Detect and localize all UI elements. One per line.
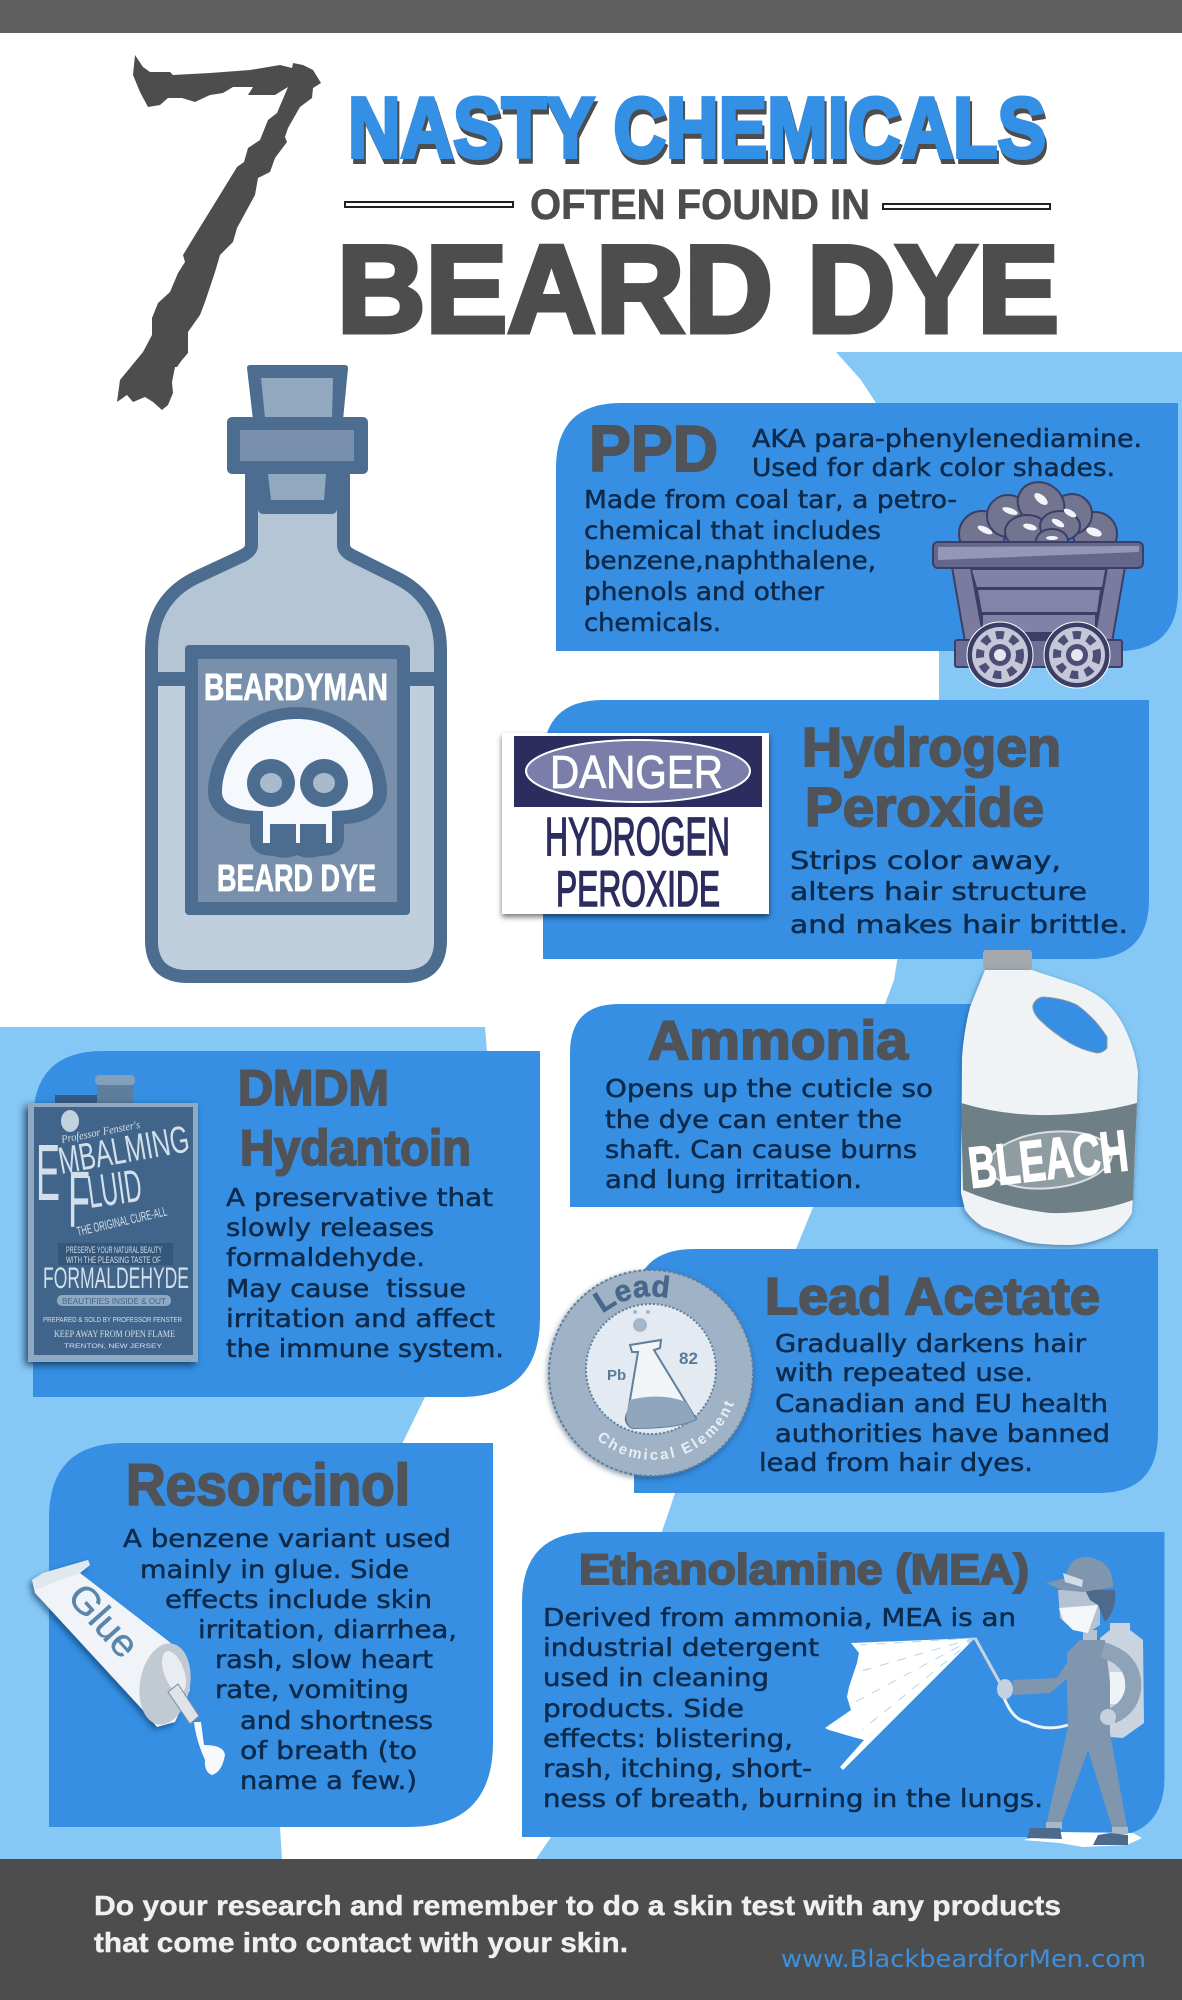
text: DMDM description: formaldehyde. bbox=[226, 1243, 425, 1272]
icon: embalming fluid flask: E bbox=[36, 1128, 60, 1217]
text: DMDM description bbox=[226, 1183, 504, 1363]
footer bar bbox=[0, 1859, 1182, 2000]
text: MEA description bbox=[543, 1603, 1043, 1813]
panel: Hydrogen Peroxide bbox=[502, 700, 1149, 959]
text: PPD description: chemical that includes bbox=[584, 516, 881, 545]
icon: glue tube: Glue bbox=[59, 1576, 147, 1666]
heading: Hydrogen Peroxide bbox=[802, 716, 1061, 838]
heading: Resorcinol: Resorcinol bbox=[126, 1453, 410, 1518]
icon: embalming fluid flask: PRESERVE YOUR NATURAL BEAUTY bbox=[66, 1245, 162, 1255]
icon: embalming fluid flask: THE ORIGINAL CURE-ALL bbox=[75, 1204, 168, 1239]
panel: Resorcinol bbox=[32, 1443, 493, 1827]
text: MEA description: products. Side bbox=[543, 1694, 744, 1723]
icon: danger sign: DANGER bbox=[550, 746, 723, 798]
title: Nasty Chemicals: NASTY CHEMICALS bbox=[350, 86, 1048, 181]
icon: spray cone bbox=[825, 1638, 975, 1770]
text: Resorcinol description: name a few.) bbox=[240, 1766, 417, 1795]
icon: embalming fluid flask: WITH THE PLEASING TASTE OF bbox=[66, 1255, 161, 1265]
heading: Hydrogen Peroxide: Hydrogen bbox=[802, 716, 1061, 778]
subtitle: often found in: OFTEN FOUND IN bbox=[530, 181, 870, 229]
icon: embalming fluid flask: TRENTON, NEW JERSEY bbox=[64, 1344, 162, 1350]
text: PPD description: AKA para-phenylenediamine. bbox=[752, 424, 1142, 453]
text: DMDM description: slowly releases bbox=[226, 1213, 434, 1242]
text: MEA description: rash, itching, short- bbox=[543, 1754, 812, 1783]
heading: DMDM Hydantoin bbox=[238, 1060, 471, 1176]
text: Resorcinol description: rate, vomiting bbox=[215, 1675, 409, 1704]
text: Hydrogen Peroxide description: alters hair structure bbox=[790, 877, 1087, 906]
panel: PPD bbox=[556, 403, 1178, 688]
bottle label text: Beard Dye: BEARD DYE bbox=[217, 858, 376, 900]
numeral 7 bbox=[117, 55, 321, 410]
panel: Ammonia bbox=[570, 950, 1138, 1245]
text: Hydrogen Peroxide description: and makes hair brittle. bbox=[790, 910, 1128, 939]
text: DMDM description: irritation and affect bbox=[226, 1304, 495, 1333]
icon: lead element badge bbox=[544, 1268, 756, 1482]
background shape: right light blue bbox=[536, 352, 1182, 1859]
text: Ammonia description bbox=[605, 1074, 933, 1194]
heading: DMDM Hydantoin: Hydantoin bbox=[240, 1120, 471, 1176]
text: Ammonia description: Opens up the cuticle so bbox=[605, 1074, 933, 1103]
icon: lead element badge: Lead bbox=[592, 1275, 670, 1313]
icon: danger sign bbox=[502, 733, 769, 917]
icon: embalming fluid flask bbox=[28, 1075, 198, 1362]
text: Lead Acetate description: Gradually darkens hair bbox=[775, 1329, 1087, 1358]
icon: embalming fluid flask: Professor Fenster's bbox=[59, 1119, 141, 1146]
text: PPD description: benzene,naphthalene, bbox=[584, 546, 876, 575]
text: MEA description: industrial detergent bbox=[543, 1633, 819, 1662]
title: Beard Dye: BEARD DYE bbox=[337, 221, 1059, 359]
icon: lead element badge: Chemical Element bbox=[598, 1400, 734, 1460]
icon: embalming fluid flask: PREPARED & SOLD BY PROFESSOR FENSTER bbox=[43, 1317, 182, 1324]
text: Resorcinol description: rash, slow heart bbox=[215, 1645, 433, 1674]
subtitle: often found in bbox=[345, 181, 1050, 229]
heading: PPD: PPD bbox=[589, 412, 718, 485]
background shape: left light blue bbox=[0, 1027, 540, 1859]
heading: DMDM Hydantoin: DMDM bbox=[238, 1060, 389, 1116]
icon: embalming fluid flask: MBALMING bbox=[55, 1119, 193, 1183]
icon: bleach jug bbox=[961, 950, 1138, 1245]
heading: Ammonia: Ammonia bbox=[648, 1009, 908, 1071]
text: Resorcinol description: mainly in glue. Side bbox=[140, 1555, 409, 1584]
icon: coal mine cart bbox=[933, 474, 1143, 688]
footer message: Do your research and remember to do a skin test with any products bbox=[94, 1890, 1061, 1921]
text: PPD description bbox=[584, 424, 1142, 637]
icon: embalming fluid flask: KEEP AWAY FROM OPEN FLAME bbox=[54, 1329, 175, 1339]
icon: danger sign: HYDROGEN bbox=[545, 807, 730, 867]
icon: embalming fluid flask: F bbox=[68, 1155, 90, 1244]
panel: Lead Acetate bbox=[544, 1249, 1158, 1493]
text: DMDM description: the immune system. bbox=[226, 1334, 504, 1363]
text: MEA description: effects: blistering, bbox=[543, 1724, 793, 1753]
panel: DMDM Hydantoin bbox=[28, 1051, 540, 1397]
text: Hydrogen Peroxide description: Strips color away, bbox=[790, 846, 1061, 875]
icon: embalming fluid flask: LUID bbox=[84, 1159, 145, 1218]
text: PPD description: Made from coal tar, a petro- bbox=[584, 485, 957, 514]
icon: skull bbox=[208, 707, 387, 858]
heading: Ethanolamine (MEA): Ethanolamine (MEA) bbox=[579, 1546, 1029, 1594]
icon: lead element badge: Pb bbox=[607, 1367, 626, 1384]
icon: poison bottle bbox=[148, 365, 444, 976]
text: DMDM description: A preservative that bbox=[226, 1183, 493, 1212]
text: MEA description: used in cleaning bbox=[543, 1663, 769, 1692]
text: Lead Acetate description: lead from hair dyes. bbox=[759, 1448, 1033, 1477]
text: Resorcinol description: A benzene variant used bbox=[123, 1524, 451, 1553]
icon: lead element badge: 82 bbox=[679, 1349, 698, 1368]
text: PPD description: chemicals. bbox=[584, 608, 721, 637]
text: Lead Acetate description: Canadian and EU health bbox=[775, 1389, 1108, 1418]
text: Resorcinol description: and shortness bbox=[240, 1706, 433, 1735]
text: PPD description: phenols and other bbox=[584, 577, 825, 606]
text: Ammonia description: and lung irritation. bbox=[605, 1165, 862, 1194]
text: Hydrogen Peroxide description bbox=[790, 846, 1128, 939]
top bar bbox=[0, 0, 1182, 33]
panel: Ethanolamine MEA bbox=[522, 1532, 1164, 1847]
text: Lead Acetate description: authorities have banned bbox=[775, 1419, 1110, 1448]
title: Nasty Chemicals: NASTY CHEMICALS bbox=[348, 81, 1046, 176]
text: Lead Acetate description bbox=[759, 1329, 1110, 1477]
icon: embalming fluid flask: FORMALDEHYDE bbox=[43, 1262, 189, 1295]
footer message bbox=[94, 1890, 1061, 1958]
icon: worker with backpack sprayer bbox=[975, 1557, 1144, 1847]
text: MEA description: ness of breath, burning in the lungs. bbox=[543, 1784, 1043, 1813]
icon: glue tube bbox=[32, 1560, 225, 1775]
text: PPD description: Used for dark color shades. bbox=[752, 453, 1115, 482]
heading: Lead Acetate: Lead Acetate bbox=[765, 1268, 1100, 1326]
heading: Hydrogen Peroxide: Peroxide bbox=[805, 776, 1044, 838]
text: DMDM description: May cause tissue bbox=[226, 1274, 466, 1303]
icon: danger sign: PEROXIDE bbox=[556, 861, 720, 917]
text: Lead Acetate description: with repeated use. bbox=[775, 1358, 1033, 1387]
icon: embalming fluid flask: BEAUTIFIES INSIDE & OUT bbox=[62, 1297, 166, 1306]
text: Ammonia description: shaft. Can cause burns bbox=[605, 1135, 917, 1164]
bottle label text: Beardyman: BEARDYMAN bbox=[204, 667, 388, 709]
text: Resorcinol description: of breath (to bbox=[240, 1736, 417, 1765]
footer website link: www.BlackbeardforMen.com bbox=[781, 1945, 1146, 1973]
text: Resorcinol description bbox=[123, 1524, 457, 1795]
text: Resorcinol description: effects include skin bbox=[165, 1585, 432, 1614]
footer message: that come into contact with your skin. bbox=[94, 1927, 628, 1958]
text: Ammonia description: the dye can enter the bbox=[605, 1105, 902, 1134]
text: Resorcinol description: irritation, diarrhea, bbox=[198, 1615, 457, 1644]
text: MEA description: Derived from ammonia, MEA is an bbox=[543, 1603, 1016, 1632]
